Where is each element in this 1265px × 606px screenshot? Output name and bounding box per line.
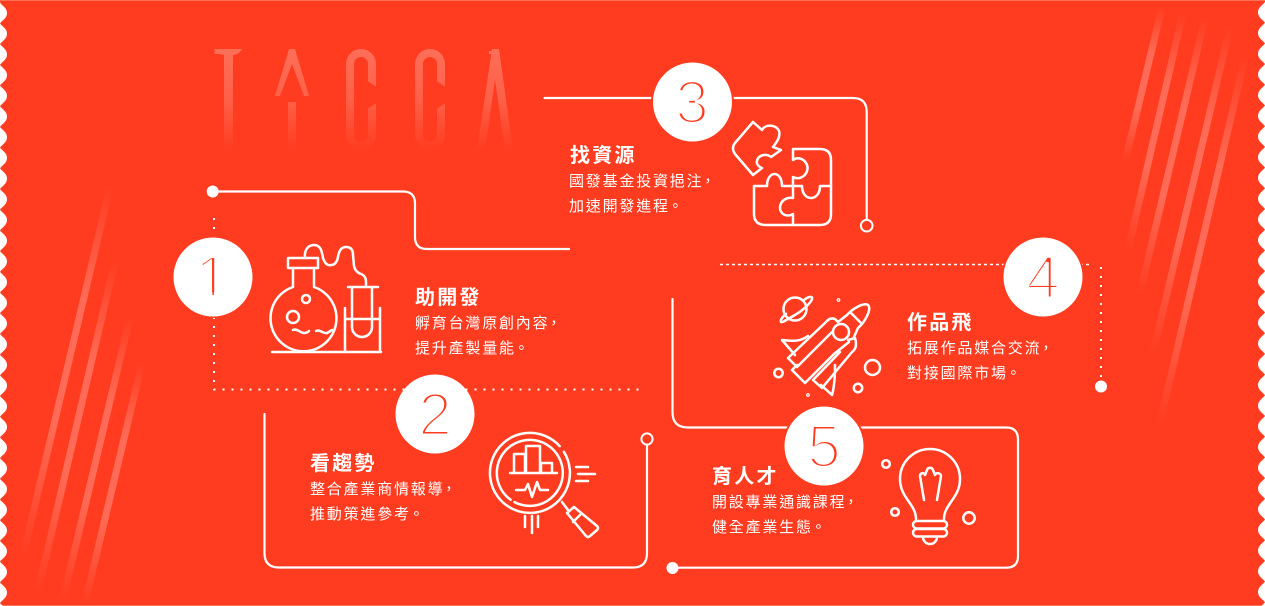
text: 開設專業通識課程: 開設專業通識課程， — [712, 494, 860, 511]
text: 開設專業通識課程: 健全產業生態。 — [712, 519, 828, 536]
icon: flask and test tube — [271, 245, 381, 352]
text: 拓展作品媒合交流 — [907, 339, 1055, 382]
number badge 2 — [396, 374, 474, 454]
heading: 看趨勢: 看趨勢 — [310, 452, 377, 475]
text: 孵育台灣原創內容: 孵育台灣原創內容， — [415, 315, 563, 332]
text: 拓展作品媒合交流: 對接國際市場。 — [907, 365, 1023, 382]
text: 開設專業通識課程 — [712, 494, 860, 536]
text: 孵育台灣原創內容 — [415, 315, 563, 357]
right light stripes — [1125, 7, 1245, 423]
top edge highlight — [0, 0, 1265, 1]
text: 拓展作品媒合交流: 拓展作品媒合交流， — [907, 339, 1055, 357]
connector: step 5 solid line — [666, 299, 1018, 574]
number badge 3: 3 — [675, 69, 709, 136]
text: 國發基金投資挹注 — [569, 173, 717, 215]
left light stripes — [23, 187, 142, 603]
text: 整合產業商情報導 — [310, 481, 458, 523]
number badge 4 — [1002, 236, 1084, 318]
icon: puzzle pieces — [733, 122, 831, 225]
connector: step 2 solid line — [264, 414, 653, 568]
number badge 3 — [651, 60, 734, 144]
icon: rocket and planet — [774, 297, 880, 396]
number badge 1: 1 — [195, 244, 229, 311]
panel: step 1 — [172, 236, 563, 357]
text: 國發基金投資挹注: 國發基金投資挹注， — [569, 173, 717, 190]
text: 國發基金投資挹注: 加速開發進程。 — [569, 198, 685, 215]
logo: TAGGA: TAGGA — [214, 21, 507, 181]
panel: step 5 — [712, 404, 975, 544]
heading: 作品飛: 作品飛 — [907, 311, 974, 334]
connector: step 1 solid line — [207, 186, 569, 249]
right scalloped edge — [1257, 2, 1265, 606]
number badge 2: 2 — [418, 381, 452, 448]
icon: magnifier with chart — [490, 433, 598, 537]
number badge 5 — [782, 404, 866, 488]
text: 整合產業商情報導: 整合產業商情報導， — [310, 481, 458, 498]
number badge 5: 5 — [807, 413, 841, 480]
number badge 4: 4 — [1026, 244, 1060, 311]
heading: 助開發: 助開發 — [415, 286, 482, 309]
text: 整合產業商情報導: 推動策進參考。 — [310, 505, 426, 523]
connector: step 4 dotted line — [720, 264, 1107, 392]
number badge 1 — [172, 236, 254, 318]
panel: step 2 — [310, 374, 598, 537]
icon: light bulb — [882, 449, 975, 544]
left scalloped edge — [0, 2, 8, 606]
heading: 育人才: 育人才 — [712, 464, 779, 488]
panel: step 3 — [569, 60, 831, 225]
connector: step 3 solid line — [544, 98, 872, 232]
heading: 找資源: 找資源 — [570, 143, 637, 167]
connector: step 1 to 2 dotted line — [214, 218, 645, 390]
bottom edge highlight — [0, 605, 1265, 606]
text: 孵育台灣原創內容: 提升產製量能。 — [415, 340, 531, 357]
panel: step 4 — [774, 236, 1084, 396]
